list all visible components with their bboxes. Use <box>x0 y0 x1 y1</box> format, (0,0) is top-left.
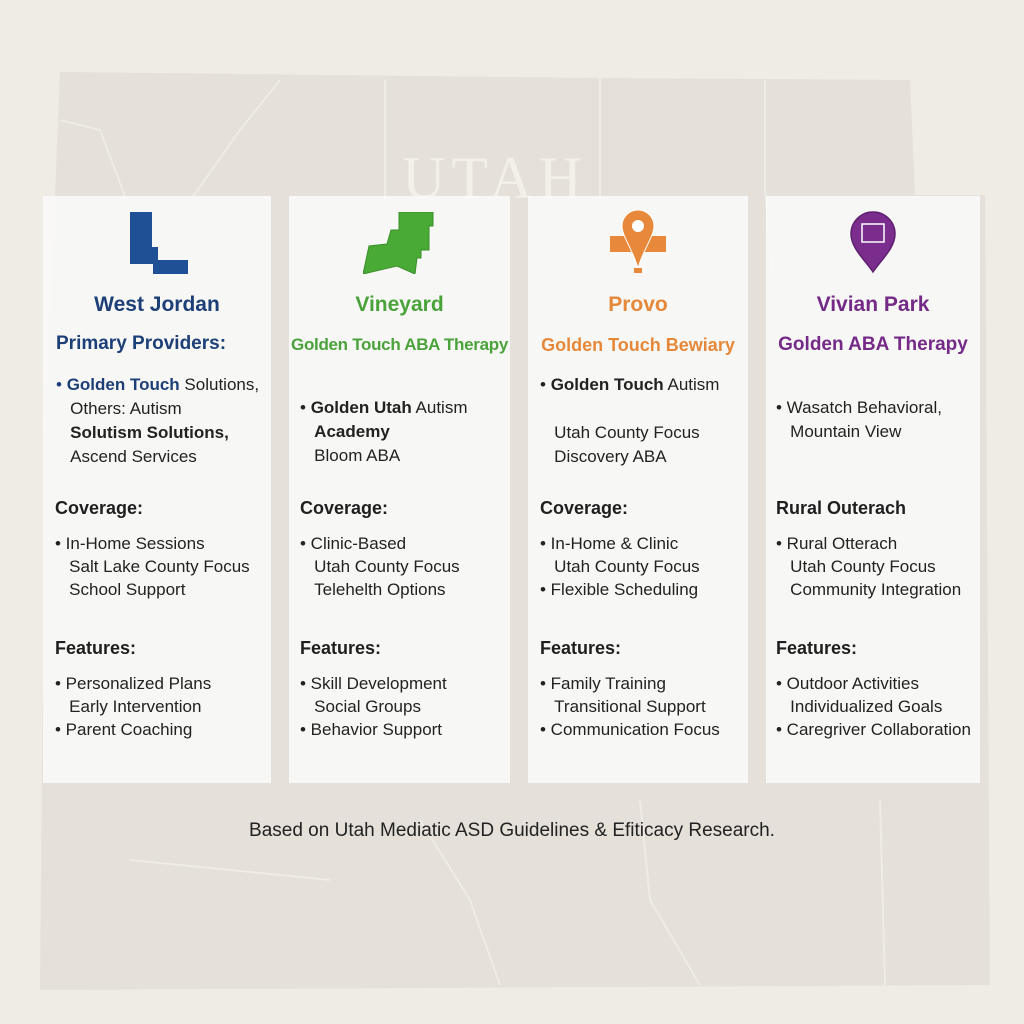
coverage: Coverage: <box>300 498 388 518</box>
panel: West Jordan <box>43 196 271 783</box>
providers list: Utah County Focus <box>554 423 700 442</box>
panel: West Jordan: • Personalized Plans <box>55 674 211 693</box>
coverage: Rural Outerach <box>776 498 906 518</box>
subheading: Golden Touch ABA Therapy <box>291 335 508 354</box>
features: Features: <box>300 638 381 658</box>
features: Features: <box>55 638 136 658</box>
panel: Vivian Park: • Outdoor Activities <box>776 674 919 693</box>
panel: Provo: • Communication Focus <box>540 720 720 739</box>
panel: Vivian Park: Utah County Focus <box>790 557 936 576</box>
heading: West Jordan: West Jordan <box>94 293 220 316</box>
panel: Vivian Park: Individualized Goals <box>790 697 942 716</box>
providers list: Discovery ABA <box>554 447 667 466</box>
providers list: Academy <box>314 422 390 441</box>
panel: Vineyard <box>289 196 510 783</box>
coverage: Coverage: <box>540 498 628 518</box>
panel: Provo: • Flexible Scheduling <box>540 580 698 599</box>
panel: Vivian Park: • Caregriver Collaboration <box>776 720 971 739</box>
icon: West Jordan shape <box>130 212 188 274</box>
panel: Vineyard: • Clinic-Based <box>300 534 406 553</box>
icon: Vineyard shape <box>363 212 434 274</box>
panel: West Jordan: • Parent Coaching <box>55 720 192 739</box>
providers list <box>540 375 719 466</box>
providers list: • Golden Utah Autism <box>300 398 468 417</box>
providers list: • Golden Touch Autism <box>540 375 719 394</box>
providers list: Ascend Services <box>70 447 197 466</box>
panel: Provo: • In-Home & Clinic <box>540 534 678 553</box>
panel: Vivian Park <box>766 196 980 783</box>
footer note: Based on Utah Mediatic ASD Guidelines & Efiticacy Research. <box>249 820 775 841</box>
subheading: Golden ABA Therapy <box>778 334 968 355</box>
panel: Vineyard: • Skill Development <box>300 674 447 693</box>
panel: Vivian Park: Community Integration <box>790 580 961 599</box>
heading: Vineyard: Vineyard <box>355 293 444 316</box>
panel: Vineyard: Social Groups <box>314 697 421 716</box>
subheading: Primary Providers: <box>56 333 226 354</box>
providers list <box>300 398 468 465</box>
panel: West Jordan: Salt Lake County Focus <box>69 557 250 576</box>
providers list: Mountain View <box>790 422 901 441</box>
features: Features: <box>540 638 621 658</box>
icon: Vivian Park pin <box>850 211 896 274</box>
providers list: • Wasatch Behavioral, <box>776 398 942 417</box>
panel: Vineyard: Telehelth Options <box>314 580 446 599</box>
panel: Provo <box>528 196 748 783</box>
providers list <box>776 398 942 441</box>
subheading: Golden Touch Bewiary <box>541 335 735 355</box>
features: Features: <box>776 638 857 658</box>
heading: Vivian Park: Vivian Park <box>817 293 929 316</box>
panel: West Jordan: • In-Home Sessions <box>55 534 205 553</box>
panel: West Jordan: School Support <box>69 580 185 599</box>
panel: Vivian Park: • Rural Otterach <box>776 534 897 553</box>
panel: Provo: Utah County Focus <box>554 557 700 576</box>
panel: Vineyard: • Behavior Support <box>300 720 442 739</box>
providers list: Solutism Solutions, <box>70 423 229 442</box>
heading: Provo: Provo <box>608 293 668 316</box>
icon: Provo pin <box>610 210 666 273</box>
panel: Vineyard: Utah County Focus <box>314 557 460 576</box>
panel: Provo: Transitional Support <box>554 697 706 716</box>
coverage: Coverage: <box>55 498 143 518</box>
providers list: Others: Autism <box>70 399 182 418</box>
panel: Provo: • Family Training <box>540 674 666 693</box>
providers list: Bloom ABA <box>314 446 400 465</box>
panel: West Jordan: Early Intervention <box>69 697 201 716</box>
providers list: • Golden Touch Solutions, <box>56 375 259 394</box>
title: UTAH watermark: UTAH <box>402 145 588 211</box>
providers list <box>56 375 259 466</box>
